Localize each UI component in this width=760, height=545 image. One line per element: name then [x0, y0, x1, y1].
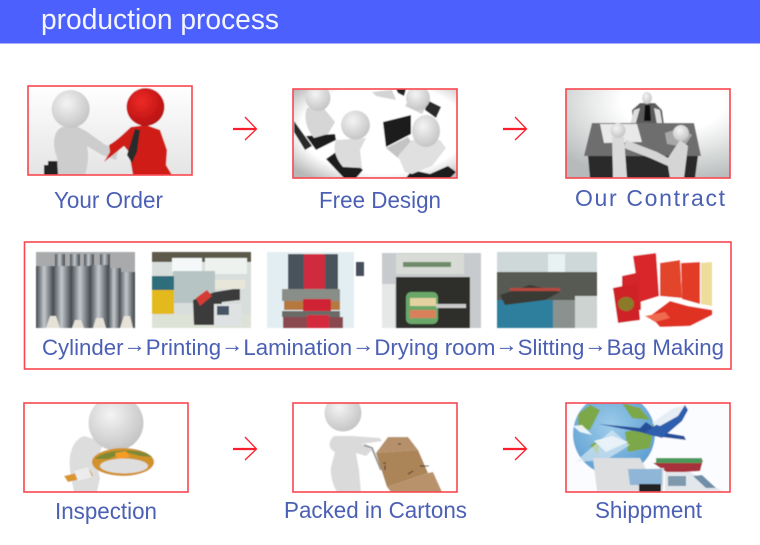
- step: shippment: [566, 393, 730, 523]
- process labels: Drying room: [374, 335, 495, 360]
- process labels: Slitting: [518, 335, 584, 360]
- image: figure with magnifier: [64, 404, 155, 492]
- step: free design: [293, 85, 457, 213]
- step: inspection: [24, 396, 188, 524]
- arrow: [503, 117, 526, 140]
- step: packed in cartons: [286, 402, 466, 518]
- image: handshake figures: [28, 86, 192, 175]
- title: production process: [41, 4, 279, 36]
- panel: printing process: [24, 242, 731, 369]
- process labels: Bag Making: [607, 335, 724, 360]
- image: contract desk figures: [566, 89, 730, 178]
- process labels: →: [124, 332, 146, 357]
- frame: [566, 403, 730, 492]
- process labels: Lamination: [243, 335, 352, 360]
- photo: bag making: [613, 252, 712, 328]
- process labels: →: [221, 332, 243, 357]
- process labels: →: [584, 332, 607, 357]
- process labels: →: [495, 332, 518, 357]
- label: Shippment: [595, 497, 703, 523]
- photo: printing: [152, 252, 251, 328]
- photo: drying room: [382, 253, 481, 328]
- header banner: [0, 0, 760, 44]
- label: Free Design: [319, 187, 441, 213]
- step: our contract: [566, 89, 730, 211]
- arrow: [233, 117, 256, 140]
- frame: [28, 86, 192, 175]
- photo: lamination: [267, 252, 364, 328]
- image: globe, plane, ship, truck, train: [572, 404, 722, 492]
- photo: slitting: [497, 252, 597, 328]
- arrow: [233, 437, 256, 460]
- arrow: [503, 437, 526, 460]
- process labels: Printing: [146, 335, 221, 360]
- label: Packed in Cartons: [284, 497, 467, 523]
- image: figure with hand truck and cartons: [324, 404, 442, 492]
- image: meeting table figures: [293, 85, 457, 178]
- frame: [293, 89, 457, 178]
- frame: [293, 403, 457, 492]
- step: your order: [28, 86, 192, 213]
- frame: [24, 242, 731, 369]
- label: Your Order: [54, 187, 163, 213]
- process labels: →: [352, 332, 374, 357]
- photo: cylinder: [36, 252, 135, 328]
- process labels: Cylinder: [42, 335, 125, 360]
- label: Our Contract: [575, 185, 726, 211]
- frame: [24, 403, 188, 492]
- label: Inspection: [55, 498, 157, 524]
- frame: [566, 89, 730, 178]
